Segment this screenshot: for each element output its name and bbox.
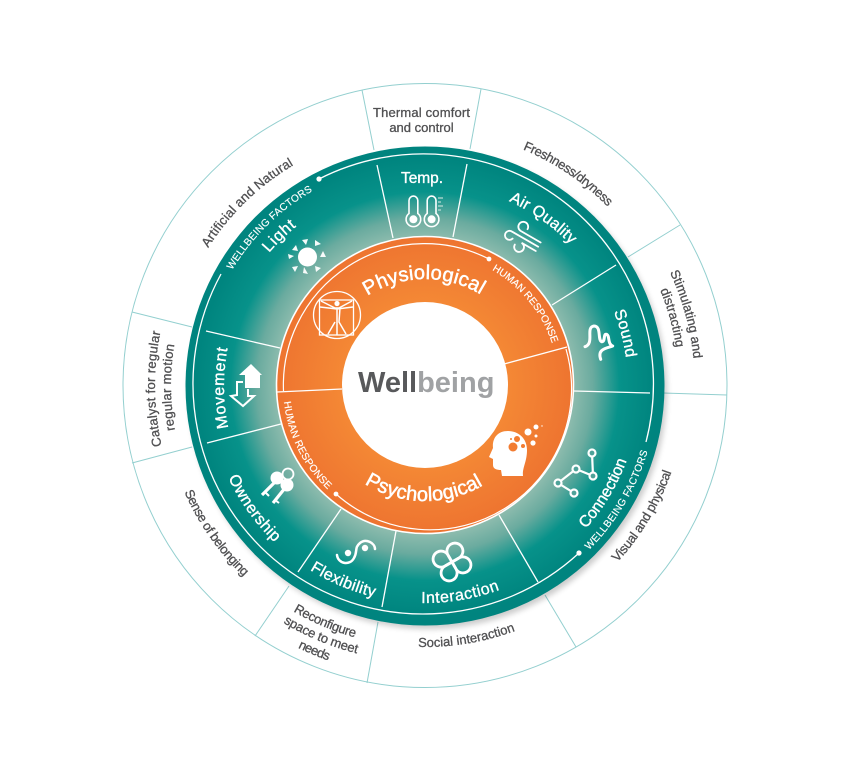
label: human response top: HUMAN RESPONSE bbox=[492, 264, 558, 344]
label: wellbeing factors top: WELLBEING FACTORS bbox=[226, 186, 312, 268]
label: movement: Movement bbox=[215, 346, 228, 429]
label: interaction: Interaction bbox=[422, 582, 499, 604]
text: social interaction: Social interaction bbox=[418, 625, 515, 648]
centre circle bbox=[342, 302, 508, 468]
panel: human response orange ring bbox=[276, 236, 574, 534]
text: artificial and natural: Artificial and Natural bbox=[202, 158, 293, 248]
icon: wind bbox=[500, 216, 546, 260]
icon: interaction knot bbox=[428, 538, 476, 586]
icon: movement arrows bbox=[231, 364, 262, 406]
text: stimulating line 1: Stimulating and bbox=[670, 270, 703, 358]
label: light: Light bbox=[262, 219, 296, 252]
heading: physiological: Physiological bbox=[362, 264, 487, 296]
icon: sound wave bbox=[585, 326, 613, 359]
text: thermal comfort: Thermal comfort bbox=[373, 105, 470, 120]
icon: thermometers bbox=[406, 196, 443, 227]
label: human response bottom: HUMAN RESPONSE bbox=[284, 402, 332, 490]
label: sound: Sound bbox=[614, 310, 638, 357]
icon: flexibility curve bbox=[337, 541, 375, 563]
text: stimulating line 2: distracting bbox=[660, 288, 683, 347]
text: reconfigure line 3: needs bbox=[298, 642, 330, 660]
heading: psychological: Psychological bbox=[366, 472, 482, 503]
icon: sun bbox=[288, 239, 326, 274]
text: reconfigure line 1: Reconfigure bbox=[294, 604, 356, 637]
line: top human response arc bbox=[283, 244, 491, 391]
text: visual and physical: Visual and physical bbox=[610, 470, 672, 560]
label: air quality: Air Quality bbox=[508, 192, 577, 244]
text: sense of belonging: Sense of belonging bbox=[185, 490, 248, 578]
label: temp: Temp. bbox=[401, 170, 443, 187]
outer ring: factor descriptions bbox=[122, 83, 728, 688]
text: catalyst line 2: regular motion bbox=[162, 344, 176, 430]
title: wellbeing: Wellbeing bbox=[358, 367, 494, 399]
icon: connection nodes bbox=[554, 450, 596, 496]
icon: head with bubbles bbox=[489, 424, 543, 476]
panel: wellbeing factors teal ring bbox=[186, 146, 670, 632]
label: ownership: Ownership bbox=[230, 474, 279, 541]
icon: keys bbox=[262, 468, 294, 503]
icon: vitruvian man bbox=[314, 292, 360, 338]
text: freshness: Freshness/dryness bbox=[524, 141, 612, 206]
label: wellbeing factors bottom: WELLBEING FACTORS bbox=[584, 450, 648, 549]
line: bottom wellbeing factors arc bbox=[193, 274, 582, 614]
line: top wellbeing factors arc bbox=[316, 154, 653, 442]
text: reconfigure line 2: space to meet bbox=[284, 618, 359, 654]
text: thermal comfort: and control bbox=[389, 120, 454, 135]
label: flexibility: Flexibility bbox=[310, 561, 377, 599]
label: connection: Connection bbox=[580, 459, 627, 526]
line: bottom human response arc bbox=[334, 349, 572, 530]
text: catalyst line 1: Catalyst for regular bbox=[146, 330, 161, 446]
